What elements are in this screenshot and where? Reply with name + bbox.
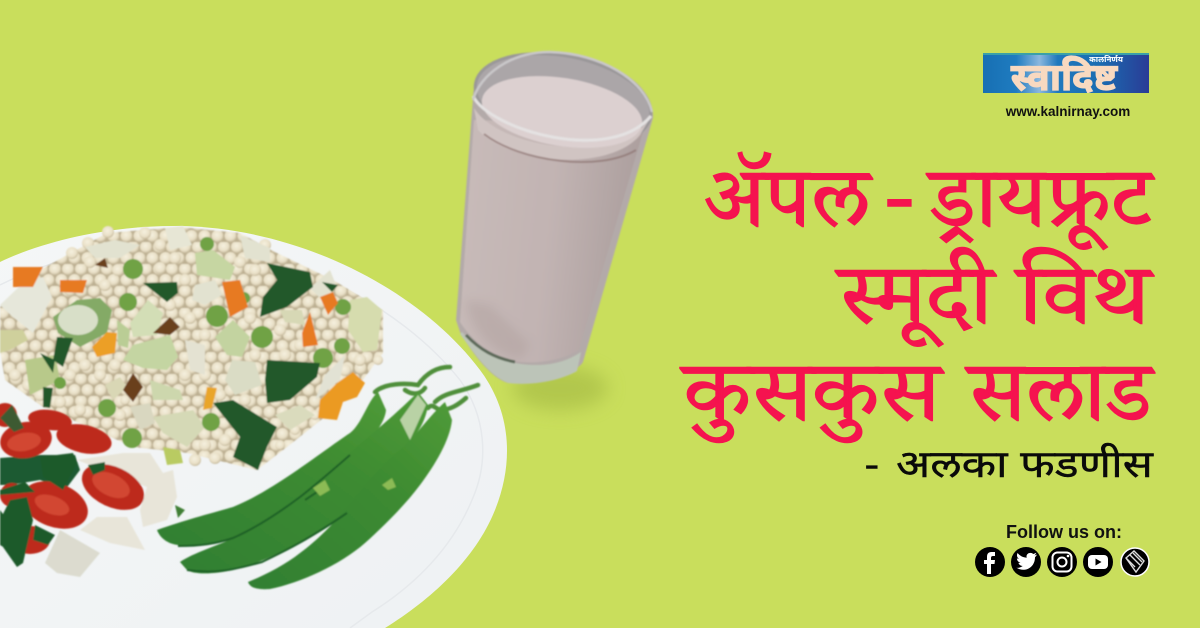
tomato and cabbage salad <box>0 403 185 577</box>
title <box>679 148 1156 473</box>
author byline: - अलका फडणीस <box>864 444 1153 486</box>
couscous pearls <box>0 226 383 470</box>
carrots and yellow pepper <box>13 267 365 420</box>
zucchini chunks <box>53 250 382 370</box>
title line 3 <box>679 342 1156 473</box>
website url: www.kalnirnay.com <box>1006 104 1130 119</box>
pod 1 <box>157 392 386 545</box>
cabbage <box>45 453 177 577</box>
title line 2: विथ <box>1018 245 1150 376</box>
icon: instagram <box>1047 547 1077 577</box>
title line 3: कुसकुस <box>683 342 940 473</box>
social icons <box>975 547 1150 577</box>
couscous salad <box>0 226 383 470</box>
pod 3 <box>248 402 452 589</box>
peas <box>54 237 351 448</box>
dark leaves base <box>0 455 80 490</box>
icon: website <box>1121 548 1149 576</box>
plate <box>0 226 507 628</box>
snow pea pods <box>157 367 478 589</box>
parsley <box>0 405 185 567</box>
icon: facebook <box>975 547 1005 577</box>
pod 2 <box>180 392 428 573</box>
logo <box>983 53 1149 93</box>
title line 2 <box>834 245 1155 376</box>
icon: youtube <box>1083 547 1113 577</box>
tomato flesh highlights <box>6 430 134 520</box>
title line 1: अ‍ॅपल - ड्रायफ्रूट <box>705 148 1151 279</box>
smoothie glass <box>456 40 659 384</box>
tomato halves <box>0 403 151 554</box>
icon: twitter <box>1011 547 1041 577</box>
title line 3: सलाड <box>968 342 1151 473</box>
follow us label: Follow us on: <box>1006 522 1122 542</box>
glass shadow <box>512 366 608 410</box>
title line 2: स्मूदी <box>839 245 993 376</box>
pale artichoke pieces <box>0 226 345 465</box>
pea stems <box>375 367 478 410</box>
logo brand small text: कालनिर्णय <box>1089 55 1123 64</box>
raisins <box>95 258 180 402</box>
herbs <box>40 263 338 470</box>
